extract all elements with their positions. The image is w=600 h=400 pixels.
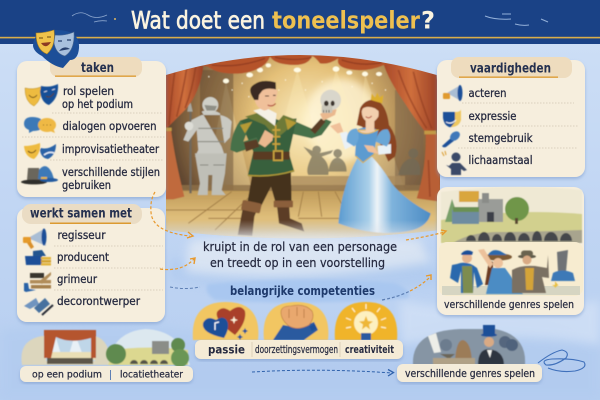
icon: expression mask (443, 109, 461, 127)
title: ? (421, 6, 435, 34)
actor with skull (230, 81, 337, 236)
arrow: werkt samen to caption (160, 258, 195, 270)
logo: theatre masks badge (33, 30, 79, 68)
icon: improvisation masks (24, 143, 56, 159)
stage illustration (165, 47, 442, 247)
competency: doorzettingsvermogen (264, 302, 328, 340)
character: lady with hat (478, 249, 523, 294)
labels: competencies: creativiteit (345, 343, 394, 356)
labels: competencies (195, 340, 403, 359)
image: op een podium (21, 330, 111, 365)
heading: werkt samen met: werkt samen met (30, 206, 132, 222)
caption: stage description: kruipt in de rol van een personage (203, 240, 397, 254)
arrow: competencies to bottom label (252, 370, 394, 376)
icon: body language figure (442, 151, 467, 175)
dashed link: left of competencies (170, 287, 200, 288)
panel: genres spelen (437, 187, 584, 315)
row dividers (458, 103, 578, 148)
labels: competencies: passie (208, 342, 245, 356)
text: producent: producent (57, 250, 109, 264)
text: dialogen opvoeren: dialogen opvoeren (62, 119, 156, 133)
arrow: taken to stage caption (151, 192, 193, 238)
image: locatietheater (106, 329, 190, 367)
labels: competencies: doorzettingsvermogen (255, 344, 338, 356)
text: improvisatietheater: improvisatietheater (62, 142, 159, 156)
text: verschillende genres spelen: verschillende genres spelen (444, 298, 574, 311)
actress in blue dress (330, 93, 431, 233)
panel: vaardigheden (437, 57, 585, 177)
label: verschillende genres spelen (397, 364, 542, 382)
heading: werkt samen met (22, 204, 142, 224)
label: verschillende genres spelen: verschillende genres spelen (405, 367, 535, 380)
text: decorontwerper: decorontwerper (57, 294, 140, 308)
text: grimeur: grimeur (57, 272, 97, 286)
row dividers (54, 246, 163, 290)
competency: creativiteit (335, 302, 397, 340)
audience silhouettes (303, 146, 420, 175)
stage floor (166, 176, 440, 238)
image: castle with audience (441, 187, 582, 243)
character: adventurer (450, 250, 483, 293)
labels: venue types (20, 366, 193, 382)
text: regisseur: regisseur (58, 228, 106, 242)
image: theatre performance oval (413, 325, 525, 365)
header banner (0, 0, 600, 44)
text: rol spelen: rol spelen (63, 84, 114, 98)
icon: makeup tools (24, 272, 51, 292)
knight in armour (183, 97, 232, 195)
text: expressie: expressie (468, 109, 516, 123)
text: stemgebruik: stemgebruik (468, 131, 533, 145)
stage backdrop (165, 50, 442, 193)
text: lichaamstaal: lichaamstaal (468, 153, 532, 167)
title: Wat doet een (131, 6, 265, 34)
labels: venue types: locatietheater (120, 370, 184, 380)
icon: microphone (442, 129, 462, 147)
heading band: belangrijke competenties (207, 280, 409, 303)
panel: taken (17, 57, 166, 197)
icon: hats (21, 166, 58, 184)
character: gentleman (512, 250, 549, 293)
title: toneelspeler (272, 6, 420, 34)
heading: vaardigheden (451, 57, 572, 78)
text: verschillende stijlen: gebruiken (62, 178, 111, 192)
title (131, 6, 435, 34)
caption: stage description (185, 235, 432, 277)
stage bottom fade (166, 221, 437, 238)
arrow: competencies to genres (382, 275, 431, 300)
statue on pedestal (551, 250, 575, 288)
row dividers (22, 113, 165, 160)
arrow: caption to genres image (406, 230, 446, 240)
text: rol spelen (62, 84, 133, 111)
icon: producer money (25, 250, 51, 266)
icon: speech bubbles (24, 117, 56, 133)
text: acteren: acteren (468, 86, 506, 100)
panel: werkt samen met (17, 204, 165, 322)
competency: passie (193, 302, 258, 340)
curtains (165, 47, 440, 202)
stage lights (223, 63, 382, 83)
text: verschillende stijlen: verschillende stijlen (62, 165, 160, 179)
skull (320, 90, 341, 113)
icon: megaphone (23, 228, 46, 249)
heading band: belangrijke competenties: belangrijke competenties (230, 283, 375, 298)
caption: stage description: en treedt op in een voorstelling (210, 256, 385, 270)
icon: megaphone (443, 85, 462, 101)
decorative swirl (538, 350, 585, 372)
heading: taken: taken (81, 61, 114, 76)
icon: set design tools (24, 298, 53, 315)
text: rol spelen: op het podium (62, 97, 133, 111)
icon: comedy masks (25, 84, 58, 106)
text: verschillende stijlen (62, 165, 160, 192)
heading: vaardigheden: vaardigheden (470, 62, 551, 76)
heading: taken (50, 57, 142, 77)
labels: venue types: op een podium (32, 370, 102, 380)
image: costumed characters (439, 242, 583, 296)
